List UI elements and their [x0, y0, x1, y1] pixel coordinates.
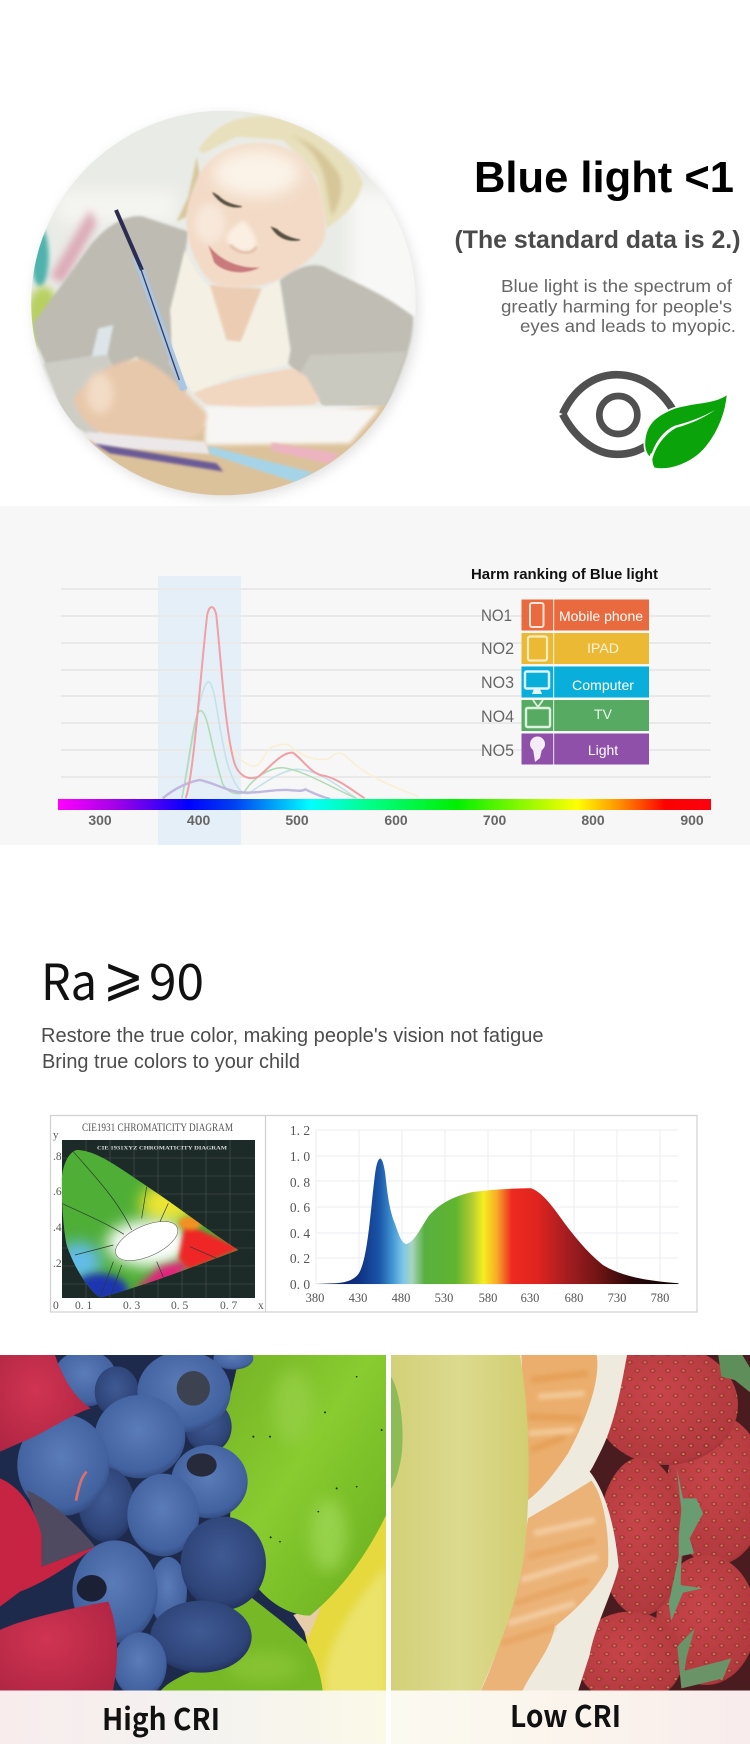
- photo: high CRI fruit: [0, 1347, 390, 1698]
- legend title: Harm ranking of Blue light: [471, 567, 658, 583]
- row: computer: Computer: [572, 677, 634, 693]
- scarf: [170, 250, 291, 393]
- axis labels: [53, 1151, 264, 1312]
- x axis labels: 730: [608, 1291, 626, 1305]
- orange flesh: [521, 1353, 597, 1500]
- forearm: [193, 368, 320, 408]
- x axis labels: 580: [479, 1291, 497, 1305]
- wavelength axis labels: 900: [680, 812, 704, 828]
- sweater right: [280, 265, 413, 405]
- mouth: [208, 245, 260, 272]
- text block: blue light description: eyes and leads to myopic.: [520, 316, 736, 336]
- wavelength axis labels: 500: [285, 812, 309, 828]
- rank labels: [481, 606, 514, 760]
- rank labels: NO2: [481, 639, 514, 658]
- wavelength axis labels: [88, 812, 704, 828]
- rank labels: NO4: [481, 707, 514, 726]
- spectrum curves: [163, 607, 419, 799]
- heading: Ra at least 90: [41, 943, 204, 1015]
- x axis labels: 380: [306, 1291, 324, 1305]
- y axis labels: [290, 1123, 310, 1292]
- wavelength axis labels: 300: [88, 812, 112, 828]
- caption: Low CRI: Low CRI: [510, 1692, 621, 1736]
- red fruit pieces: [0, 1350, 91, 1452]
- y axis labels: 0. 6: [290, 1200, 310, 1215]
- wavelength axis labels: 800: [581, 812, 605, 828]
- orange rind: [478, 1353, 627, 1697]
- x axis labels: 780: [651, 1291, 669, 1305]
- chart: CIE1931 chromaticity diagram: CIE1931 CHROMATICITY DIAGRAM: [82, 1122, 233, 1134]
- rainbow wavelength bar: [58, 799, 711, 810]
- row: light: [522, 734, 649, 764]
- flesh streaks: [501, 1373, 598, 1643]
- paper: [205, 407, 380, 445]
- axis labels: .8: [53, 1151, 62, 1163]
- axis labels: .4: [53, 1222, 62, 1234]
- row: mobile phone: [522, 600, 649, 630]
- axis labels: 0: [53, 1300, 59, 1312]
- row: computer: [522, 666, 649, 698]
- axis labels: .6: [53, 1186, 62, 1198]
- axis labels: x: [258, 1300, 264, 1312]
- rank labels: NO3: [481, 673, 514, 692]
- row: TV: [522, 700, 649, 731]
- row: iPad: IPAD: [587, 640, 619, 656]
- photo: low CRI fruit: [388, 1345, 750, 1705]
- x axis labels: [306, 1291, 669, 1305]
- row: TV: TV: [594, 706, 613, 722]
- text block: true colour description: Bring true colors to your child: [42, 1051, 300, 1073]
- caption: High CRI: [0, 1690, 386, 1744]
- leaves: [718, 1353, 750, 1393]
- strawberries: [576, 1345, 750, 1705]
- y axis labels: 1. 2: [290, 1123, 310, 1138]
- pencil: [136, 257, 184, 390]
- x axis labels: 480: [392, 1291, 410, 1305]
- blueberries: [58, 1355, 114, 1406]
- text block: true colour description: [41, 1025, 544, 1073]
- text block: blue light description: Blue light is the spectrum of: [501, 276, 732, 296]
- y axis labels: 0. 8: [290, 1175, 310, 1190]
- heading: Blue light <1: Blue light <1: [474, 153, 734, 202]
- pens: [85, 432, 210, 454]
- chart: CIE1931 chromaticity diagram: CIE 1931XYZ CHROMATICITY DIAGRAM: [97, 1146, 228, 1152]
- rank labels: NO1: [481, 606, 512, 625]
- heading: Ra at least 90: ⩾: [103, 945, 144, 1008]
- text block: true colour description: Restore the true color, making people's vision not fatigue: [41, 1025, 544, 1047]
- left hand: [73, 358, 207, 438]
- heading: Ra at least 90: 90: [149, 943, 204, 1015]
- y axis labels: 0. 2: [290, 1251, 310, 1266]
- banana: [304, 1515, 386, 1690]
- axis labels: .2: [53, 1258, 62, 1270]
- wavelength axis labels: 700: [483, 812, 506, 828]
- second lime: [161, 1598, 323, 1690]
- colour gamut horseshoe: [62, 1150, 238, 1298]
- y axis labels: 0. 0: [290, 1277, 310, 1292]
- axis labels: 0. 3: [123, 1300, 140, 1312]
- row: mobile phone: Mobile phone: [559, 608, 643, 624]
- wood table: [88, 404, 386, 496]
- eyes: [213, 193, 242, 207]
- heading: Ra at least 90: Ra: [41, 943, 97, 1015]
- hair: [198, 116, 363, 228]
- x axis labels: 630: [521, 1291, 539, 1305]
- axis labels: 0. 7: [220, 1300, 238, 1312]
- chart: CIE1931 chromaticity diagram: [53, 1122, 264, 1312]
- lime: [213, 1353, 390, 1616]
- face: [187, 143, 325, 287]
- chart: light source spectrum: [290, 1123, 679, 1305]
- text block: blue light description: [501, 276, 736, 336]
- nose: [226, 220, 257, 252]
- photo: girl writing in circle: [27, 107, 427, 507]
- caption: High CRI: High CRI: [102, 1695, 220, 1739]
- wavelength axis labels: 600: [384, 812, 408, 828]
- highlighted blue light band: [158, 576, 241, 845]
- spectrum area curve: [316, 1159, 679, 1284]
- axis labels: 0. 5: [171, 1300, 188, 1312]
- panel: chromaticity and spectrum charts: [50, 1116, 697, 1312]
- legend: harm ranking of blue light: [471, 567, 658, 764]
- icon: eye with leaf: [563, 375, 728, 469]
- x axis labels: 430: [349, 1291, 367, 1305]
- banana: [391, 1353, 529, 1697]
- wavelength axis labels: 400: [187, 812, 210, 828]
- rank labels: NO5: [481, 741, 514, 760]
- y axis labels: 0. 4: [290, 1226, 310, 1241]
- chart: CIE1931 chromaticity diagram: y: [53, 1129, 59, 1141]
- panel: blue light spectrum chart: [0, 506, 750, 845]
- sweater left: [33, 216, 188, 438]
- row: light: Light: [588, 742, 618, 758]
- row: iPad: [522, 633, 649, 664]
- axis labels: 0. 1: [75, 1300, 92, 1312]
- neck: [210, 285, 262, 342]
- x axis labels: 530: [435, 1291, 453, 1305]
- caption: Low CRI: [391, 1690, 750, 1744]
- text block: blue light description: greatly harming for people's: [501, 296, 732, 316]
- y axis labels: 1. 0: [290, 1149, 310, 1164]
- subheading: standard data: (The standard data is 2.): [454, 226, 740, 254]
- x axis labels: 680: [565, 1291, 583, 1305]
